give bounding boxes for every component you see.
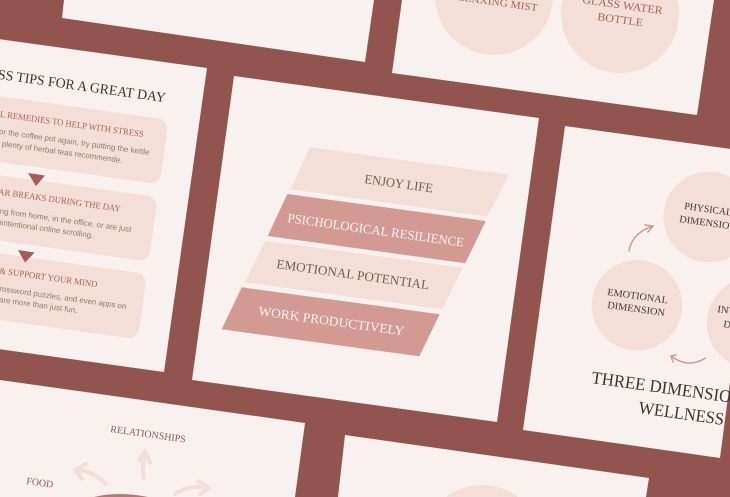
label: glass water bottle <box>582 0 664 29</box>
arrow: left <box>75 464 106 484</box>
band: enjoy life: ENJOY LIFE <box>364 171 434 196</box>
circle: bottom-center <box>446 485 518 497</box>
circle: emotional dimension: EMOTIONAL <box>607 287 669 306</box>
panel: top-right card with product circles <box>392 0 714 115</box>
band: work productively <box>222 287 440 356</box>
tip box 3 <box>0 237 147 339</box>
central arc <box>94 494 148 497</box>
tip box 1 <box>0 83 169 184</box>
panel: bottom-center card <box>338 435 649 497</box>
band: psichological resilience <box>268 194 486 263</box>
band: enjoy life <box>291 147 509 217</box>
label: food: FOOD <box>26 476 54 491</box>
panel: three dimensions of wellness <box>523 126 730 458</box>
arrow: triangle down 1 <box>28 173 45 186</box>
band: work productively: WORK PRODUCTIVELY <box>258 303 406 339</box>
arrow: triangle down 2 <box>18 250 34 262</box>
band: emotional potential <box>245 241 463 309</box>
tip 3 heading: & SUPPORT YOUR MIND <box>0 266 99 289</box>
label: glass water bottle: BOTTLE <box>597 11 644 29</box>
circle: relaxing mist <box>435 0 553 55</box>
circle: glass water bottle <box>561 0 679 73</box>
panel: bottom-left wellness map <box>0 379 305 497</box>
arrow: intellectual to emotional <box>671 355 706 363</box>
tip box 2 <box>0 160 158 262</box>
panel: top-left card <box>62 0 374 62</box>
label: relationships: RELATIONSHIPS <box>110 424 186 446</box>
circle: intellectual dimension <box>707 278 730 368</box>
circle: emotional dimension: DIMENSION <box>607 300 666 319</box>
circle: physical dimension <box>663 172 730 262</box>
arrow: right <box>175 481 209 494</box>
arrow: up <box>140 451 150 478</box>
band: psichological resilience: PSICHOLOGICAL RESILIENCE <box>287 210 465 250</box>
circle: emotional dimension <box>592 260 682 351</box>
heading: three dimensions of wellness: WELLNESS <box>637 397 725 429</box>
panel: stress tips <box>0 26 207 372</box>
band: emotional potential: EMOTIONAL POTENTIAL <box>276 256 430 292</box>
arrow: emotional to physical <box>629 225 653 251</box>
panel: stacked parallelogram chart <box>192 76 539 422</box>
